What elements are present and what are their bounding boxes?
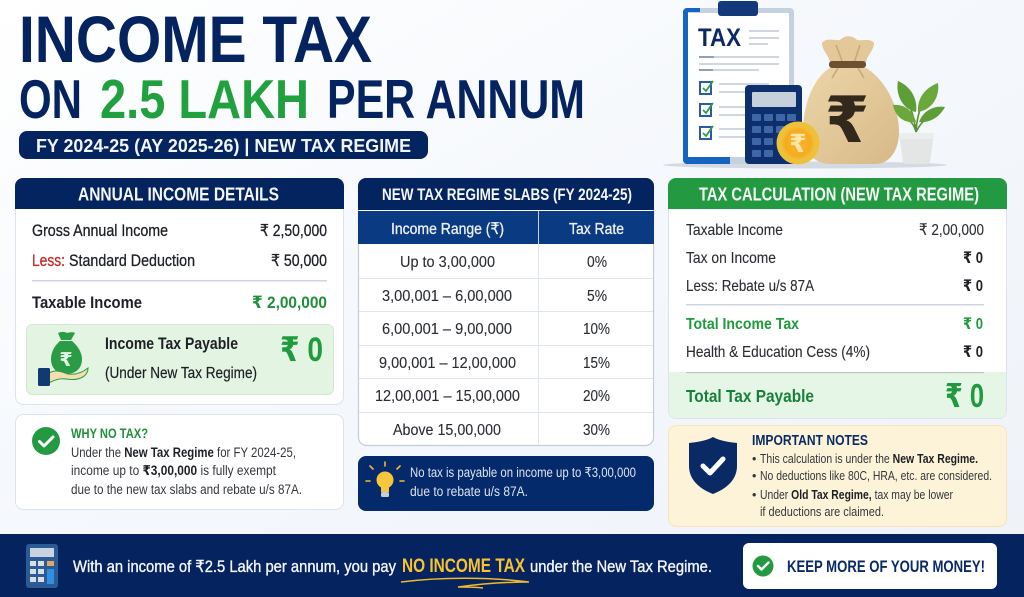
row: rebate bbox=[686, 278, 983, 295]
row: taxable income: ₹ 2,00,000 bbox=[919, 222, 984, 239]
title: 2.5 LAKH bbox=[100, 68, 309, 130]
text: why no tax explanation: WHY NO TAX? bbox=[71, 425, 148, 441]
table rows: 10% bbox=[583, 321, 610, 338]
panel: annual income details bbox=[15, 178, 344, 404]
table rows: 12,00,001 – 15,00,000 bbox=[375, 388, 520, 405]
table rows: Up to 3,00,000 bbox=[400, 254, 495, 271]
illustration: tax clipboard, calculator, money bag and plant bbox=[663, 1, 947, 168]
panel: tax calculation bbox=[668, 178, 1007, 418]
button: keep more of your money bbox=[743, 543, 997, 589]
row: total income tax bbox=[686, 316, 983, 333]
row: tax on income: ₹ 0 bbox=[963, 250, 983, 267]
heading: annual income details bbox=[15, 178, 344, 209]
callout: income tax payable: ₹ 0 bbox=[280, 331, 323, 369]
text: why no tax explanation: due to the new tax slabs and rebate u/s 87A. bbox=[71, 482, 302, 497]
panel: why no tax bbox=[16, 414, 344, 510]
text: notes: • bbox=[752, 452, 756, 466]
heading: slabs: NEW TAX REGIME SLABS (FY 2024-25) bbox=[382, 185, 632, 204]
panel: important notes bbox=[668, 426, 1006, 526]
text: notes: This calculation is under the New Tax Regime. bbox=[760, 451, 978, 466]
table rows: 5% bbox=[587, 288, 607, 305]
icon: money bag in hand bbox=[38, 332, 88, 386]
row: total tax payable: Total Tax Payable bbox=[686, 386, 814, 406]
row: tax on income: Tax on Income bbox=[686, 250, 776, 267]
text: notes: • bbox=[752, 488, 756, 502]
icon: money bag: ₹ bbox=[825, 84, 869, 156]
row: standard deduction bbox=[32, 252, 327, 270]
text: why no tax explanation bbox=[71, 425, 302, 497]
callout: income tax payable: (Under New Tax Regime) bbox=[105, 365, 257, 382]
icon: rupee coin: ₹ bbox=[789, 130, 807, 158]
table rows: 20% bbox=[583, 388, 610, 405]
subtitle pill: FY 2024-25 (AY 2025-26) | NEW TAX REGIME bbox=[36, 135, 411, 156]
row: taxable income bbox=[686, 222, 984, 239]
row: cess: ₹ 0 bbox=[963, 344, 983, 361]
text: notes: if deductions are claimed. bbox=[760, 504, 884, 519]
icon: shield with check bbox=[689, 437, 737, 494]
icon: clipboard bbox=[683, 1, 794, 164]
icon: clipboard: TAX bbox=[698, 24, 741, 52]
icon: check bbox=[752, 556, 774, 576]
row: total income tax: ₹ 0 bbox=[963, 316, 983, 333]
icon: light bulb bbox=[366, 462, 404, 497]
row: gross annual income: ₹ 2,50,000 bbox=[260, 222, 327, 240]
heading: slabs bbox=[358, 178, 654, 210]
callout: rebate tip: No tax is payable on income up to ₹3,00,000 bbox=[410, 465, 636, 480]
text: why no tax explanation: Under the New Tax Regime for FY 2024-25, bbox=[71, 445, 296, 460]
underline swoosh bbox=[401, 578, 529, 588]
row: taxable income: Taxable Income bbox=[686, 222, 783, 239]
table header: Income Range (₹) bbox=[391, 221, 504, 238]
heading: annual income details: ANNUAL INCOME DETAILS bbox=[78, 184, 279, 204]
text: why no tax explanation: income up to ₹3,00,000 is fully exempt bbox=[71, 463, 276, 478]
row: standard deduction: Standard Deduction bbox=[69, 252, 195, 270]
callout: income tax payable bbox=[26, 324, 334, 394]
title: ON bbox=[19, 68, 82, 130]
table rows: Above 15,00,000 bbox=[393, 422, 501, 439]
row: standard deduction: ₹ 50,000 bbox=[271, 252, 327, 270]
heading: tax calculation bbox=[668, 178, 1007, 209]
text: footer message bbox=[73, 556, 712, 577]
row: taxable income: Taxable Income bbox=[32, 293, 142, 312]
icon: calculator bbox=[745, 85, 802, 164]
text: footer message: under the New Tax Regime. bbox=[530, 558, 712, 576]
row: tax on income bbox=[686, 250, 983, 267]
table rows: 0% bbox=[587, 254, 607, 271]
table header bbox=[358, 211, 654, 244]
table rows: 30% bbox=[583, 422, 610, 439]
text: footer message: With an income of ₹2.5 Lakh per annum, you pay bbox=[73, 558, 397, 576]
table rows: 6,00,001 – 9,00,000 bbox=[382, 321, 512, 338]
text: notes: • bbox=[752, 469, 756, 483]
callout: rebate tip bbox=[358, 456, 654, 511]
row: rebate: ₹ 0 bbox=[963, 278, 983, 295]
row: rebate: Less: Rebate u/s 87A bbox=[686, 278, 814, 295]
callout: income tax payable: Income Tax Payable bbox=[105, 335, 238, 353]
title bbox=[19, 2, 585, 130]
row: cess: Health & Education Cess (4%) bbox=[686, 344, 870, 361]
footer banner bbox=[0, 534, 1024, 597]
icon: money bag bbox=[803, 36, 899, 164]
row: total tax payable bbox=[669, 372, 1006, 418]
text: notes bbox=[752, 433, 992, 519]
icon: calculator bbox=[26, 544, 58, 588]
icon: green check bbox=[32, 427, 60, 455]
table rows: 9,00,001 – 12,00,000 bbox=[379, 355, 516, 372]
title: PER ANNUM bbox=[327, 68, 585, 130]
row: standard deduction: Less: bbox=[32, 252, 65, 270]
row: total tax payable: ₹ 0 bbox=[945, 377, 984, 414]
table rows bbox=[375, 254, 610, 439]
icon: money bag in hand: ₹ bbox=[59, 350, 73, 371]
row: taxable income bbox=[32, 293, 327, 312]
icon: rupee coin bbox=[776, 122, 820, 164]
text: footer message: NO INCOME TAX bbox=[402, 556, 525, 577]
row: gross annual income: Gross Annual Income bbox=[32, 222, 168, 240]
row: taxable income: ₹ 2,00,000 bbox=[252, 293, 327, 312]
callout: rebate tip: due to rebate u/s 87A. bbox=[410, 484, 528, 499]
text: notes: Under Old Tax Regime, tax may be lower bbox=[760, 487, 954, 502]
text: notes: IMPORTANT NOTES bbox=[752, 433, 868, 449]
title: INCOME TAX bbox=[19, 2, 372, 76]
panel: new tax regime slabs table bbox=[358, 178, 654, 446]
row: gross annual income bbox=[32, 222, 327, 240]
table rows: 3,00,001 – 6,00,000 bbox=[382, 288, 512, 305]
table rows: 15% bbox=[583, 355, 610, 372]
icon: potted plant bbox=[893, 81, 945, 164]
row: total income tax: Total Income Tax bbox=[686, 316, 799, 333]
table header: Tax Rate bbox=[569, 221, 624, 238]
